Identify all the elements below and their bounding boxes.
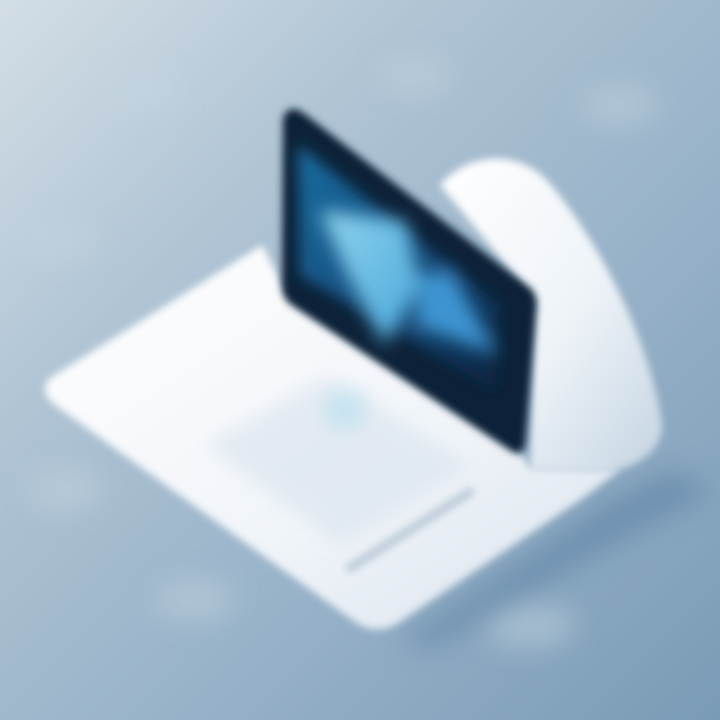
laptop shadow — [400, 470, 715, 650]
cloud behind the laptop — [440, 159, 662, 472]
keyboard area — [205, 375, 470, 545]
laptop screen display — [298, 145, 500, 390]
laptop base — [45, 245, 620, 629]
laptop screen bezel — [282, 109, 536, 453]
decorative soft background blobs — [25, 59, 658, 647]
trackpad glow — [323, 390, 367, 430]
screen glow shapes — [320, 210, 498, 355]
front edge slot — [350, 492, 470, 568]
